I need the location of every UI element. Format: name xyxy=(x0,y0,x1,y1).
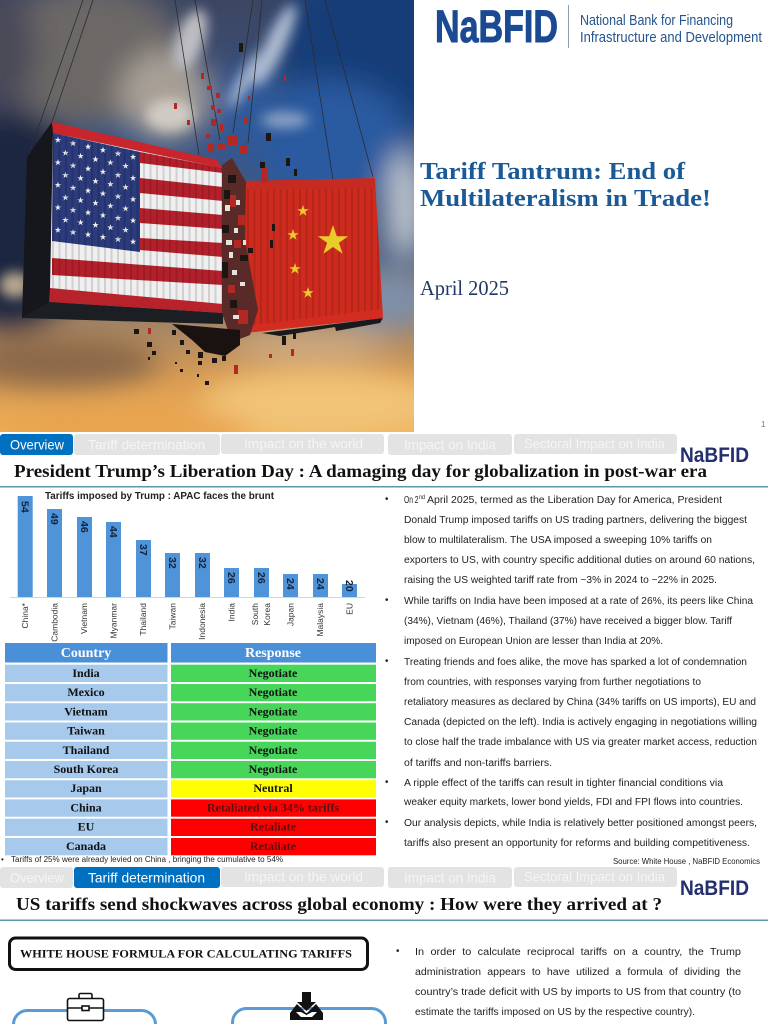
text block: formula explanation: country’s trade deficit with US by imports to US from that country (to xyxy=(415,987,742,998)
bullet: India vs peers: imposed on European Union are lesser than India at 20%. xyxy=(404,636,663,647)
bullet: ripple effect xyxy=(385,777,743,808)
country axis labels xyxy=(20,602,354,642)
table text: EU xyxy=(78,820,95,834)
heading: slide 1: President Trump’s Liberation Day : A damaging day for globalization in post-war era xyxy=(14,461,707,481)
formula box: left xyxy=(14,1010,156,1024)
bar values: 26 xyxy=(255,572,267,584)
table text: Negotiate xyxy=(249,762,298,776)
bar values: 32 xyxy=(166,557,178,569)
navigation tabs: slide 2: Tariff determination xyxy=(88,870,205,886)
US container xyxy=(22,122,223,324)
bullet: opportunity: • xyxy=(385,817,389,828)
navigation tabs: slide 2 xyxy=(0,867,677,888)
country axis labels: Japan xyxy=(286,603,296,626)
bar values: 24 xyxy=(284,578,296,590)
bullet: responses: • xyxy=(385,656,389,667)
cables xyxy=(28,0,373,180)
text block: formula explanation: administration appears to have utilized a formula of dividing the xyxy=(415,967,742,978)
response column xyxy=(171,665,376,855)
formula box: right xyxy=(232,1008,386,1024)
bullet: India vs peers: (34%), Vietnam (46%), Thailand (37%) have received a bigger blow. Tariff xyxy=(404,616,732,627)
table text: China xyxy=(70,800,102,814)
bullet: Liberation Day: exporters to US, with country specific additional duties on around 60 nations, xyxy=(404,555,755,566)
table text: Negotiate xyxy=(249,743,298,757)
bullet: Liberation Day: • xyxy=(385,494,389,505)
table text: Negotiate xyxy=(249,685,298,699)
China container xyxy=(245,178,383,336)
table text: Japan xyxy=(70,781,102,795)
table text: Canada xyxy=(66,839,106,853)
country axis labels: Indonesia xyxy=(197,603,207,640)
table header: Country xyxy=(61,646,111,661)
icon: inbox download xyxy=(290,992,323,1020)
heading: slide 2: US tariffs send shockwaves across global economy : How were they arrived at ? xyxy=(16,894,662,914)
bullet: responses: Treating friends and foes alike, the move has sparked a lot of condemnation xyxy=(404,657,747,668)
navigation tabs: slide 1: Overview xyxy=(10,436,65,452)
logo: NaBFID small slide 2: NaBFID xyxy=(680,877,749,900)
country column xyxy=(5,665,168,855)
country axis labels: Vietnam xyxy=(79,603,89,634)
navigation tabs: slide 1: Sectoral Impact on India xyxy=(524,436,665,452)
navigation tabs: slide 1 xyxy=(0,434,677,455)
bar values: 49 xyxy=(48,513,60,525)
bar values: 24 xyxy=(314,578,326,590)
navigation tabs: slide 1: Tariff determination xyxy=(88,436,205,452)
footnote: Tariffs of 25% were already levied on China , bringing the cumulative to 54% xyxy=(11,855,283,864)
country axis labels: Malaysia xyxy=(315,603,325,637)
bar values: 20 xyxy=(343,580,355,592)
table text: Negotiate xyxy=(249,704,298,718)
bullet: opportunity: tariffs also present an opportunity for reforms and building competitiveness. xyxy=(404,838,750,849)
bullet: opportunity: Our analysis depicts, while India is relatively better positioned amongst peers, xyxy=(404,818,757,829)
bullet: ripple effect: A ripple effect of the tariffs can result in tighter financial conditions via xyxy=(404,778,724,789)
table: country responses xyxy=(5,643,376,855)
navigation tabs: slide 1: Impact on the world xyxy=(244,436,363,452)
text block: formula explanation: • xyxy=(396,946,400,957)
bullet: responses: from countries, with responses varying from further negotiations to xyxy=(404,677,702,688)
navigation tabs: slide 2: Overview xyxy=(10,870,65,886)
bars xyxy=(18,496,357,597)
bar values xyxy=(18,501,355,592)
navigation tabs: slide 2: Sectoral Impact on India xyxy=(524,868,665,884)
bar chart: tariffs imposed by Trump xyxy=(10,491,365,642)
table text: Neutral xyxy=(253,781,293,795)
callout: White House formula: WHITE HOUSE FORMULA FOR CALCULATING TARIFFS xyxy=(20,946,352,960)
country axis labels: Taiwan xyxy=(168,603,178,629)
bar values: 26 xyxy=(225,572,237,584)
text block: formula explanation xyxy=(396,946,742,1018)
bullet: Liberation Day: On 2 xyxy=(404,495,418,506)
country axis labels: EU xyxy=(344,603,354,615)
chart title: Tariffs imposed by Trump : APAC faces the brunt xyxy=(45,491,275,502)
table text: Vietnam xyxy=(64,704,108,718)
bullet: India vs peers: • xyxy=(385,595,389,606)
bullet: responses: to close half the trade imbalance with US via greater market access, reduction xyxy=(404,737,757,748)
bar values: 54 xyxy=(18,501,30,513)
text block: formula explanation: estimate the tariffs imposed on US by the respective country). xyxy=(415,1007,695,1018)
table text: Taiwan xyxy=(67,724,105,738)
country axis labels: Korea xyxy=(262,603,272,626)
bullet: responses: Canada (depicted on the left). India is actively engaging in negotiations willing xyxy=(404,717,757,728)
source note: Source: White House , NaBFID Economics xyxy=(613,857,760,866)
country axis labels: Cambodia xyxy=(50,603,60,642)
footnote: • xyxy=(1,855,4,864)
bullet: Liberation Day: raising the US weighted tariff rate from ~3% in 2024 to ~22% in 2025. xyxy=(404,575,717,586)
table text: India xyxy=(72,666,100,680)
callout: White House formula xyxy=(10,938,368,970)
photo: colliding US and China shipping containers xyxy=(0,0,414,432)
date: April 2025 xyxy=(420,276,509,300)
bullet: responses: retaliatory measures as declared by China (34% tariffs on US imports), EU and xyxy=(404,697,756,708)
table text: Retaliated via 34% tariffs xyxy=(207,800,339,814)
icon: briefcase xyxy=(68,994,104,1020)
table header xyxy=(5,643,376,662)
bullet: ripple effect: weaker equity markets, lower bond yields, FDI and FPI flows into countries. xyxy=(403,797,743,808)
bullet: Liberation Day: nd xyxy=(419,495,425,501)
country axis labels: South xyxy=(250,603,260,625)
bar values: 37 xyxy=(137,544,149,556)
table text: Negotiate xyxy=(249,666,298,680)
logo: NaBFID small slide 1: NaBFID xyxy=(680,444,749,467)
logo: NaBFID full: NaBFID xyxy=(435,1,558,52)
bullet: India vs peers: While tariffs on India have been imposed at a rate of 26%, its peers like China xyxy=(404,596,754,607)
logo: NaBFID full xyxy=(435,1,762,52)
debris from collision xyxy=(134,43,297,385)
table text: Negotiate xyxy=(249,724,298,738)
bullet: ripple effect: • xyxy=(385,777,389,788)
country axis labels: India xyxy=(226,603,236,621)
slide number: 1 xyxy=(761,420,766,429)
table text: Retaliate xyxy=(250,820,297,834)
table text: Thailand xyxy=(63,743,110,757)
title: Multilateralism in Trade! xyxy=(420,186,711,212)
country axis labels: Thailand xyxy=(138,603,148,636)
bullet: Liberation Day xyxy=(385,494,755,586)
text block: formula explanation: In order to calculate reciprocal tariffs on a country, the Trump xyxy=(415,947,742,958)
country axis labels: China* xyxy=(20,602,30,629)
bar values: 44 xyxy=(107,526,119,538)
bullet: responses xyxy=(385,656,757,769)
bar values: 32 xyxy=(196,557,208,569)
logo: NaBFID full: National Bank for Financing xyxy=(580,13,733,29)
navigation tabs: slide 2: Impact on the world xyxy=(244,868,363,884)
bullet: Liberation Day: blow to multilateralism. The USA imposed a sweeping 10% tariffs on xyxy=(404,535,712,546)
navigation tabs: slide 1: Impact on India xyxy=(404,436,496,452)
country axis labels: Myanmar xyxy=(108,603,118,638)
bullet: responses: of tariffs and non-tariffs barriers. xyxy=(404,758,552,769)
table text xyxy=(54,666,339,853)
title xyxy=(420,159,711,212)
table text: South Korea xyxy=(54,762,118,776)
text block: analysis bullets xyxy=(385,494,757,849)
bullet: opportunity xyxy=(385,817,757,849)
table header: Response xyxy=(245,646,301,661)
table text: Retaliate xyxy=(250,839,297,853)
bullet: India vs peers xyxy=(385,595,754,647)
bullet: Liberation Day: Donald Trump imposed tariffs on US trading partners, delivering the biggest xyxy=(404,515,747,526)
table text: Mexico xyxy=(67,685,105,699)
navigation tabs: slide 2: Impact on India xyxy=(404,870,496,886)
bullet: Liberation Day: April 2025, termed as the Liberation Day for America, President xyxy=(427,495,722,506)
title: Tariff Tantrum: End of xyxy=(420,159,686,185)
bar values: 46 xyxy=(78,521,90,533)
